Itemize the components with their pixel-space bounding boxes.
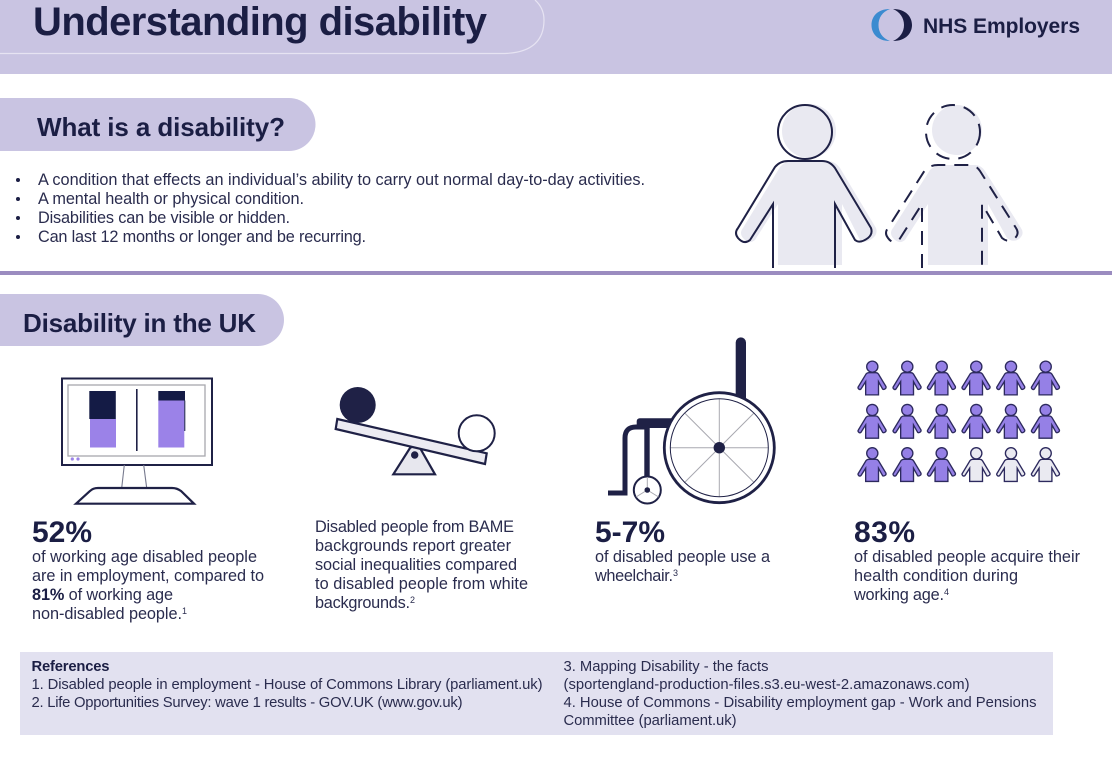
stat: 83% acquire during working age: of disabled people acquire their: [854, 548, 1081, 566]
bullet list: definition of disability: A mental health or physical condition.: [38, 190, 304, 208]
stat: 52% in employment: 81% of working age: [32, 586, 173, 604]
stat: 83% acquire during working age: health condition during: [854, 567, 1018, 585]
stat: 5-7% use a wheelchair: of disabled people use a: [595, 548, 771, 566]
bullet list: definition of disability: A condition that effects an individual’s ability to carry out normal day-to-day activities.: [38, 171, 645, 189]
stat: 5-7% use a wheelchair: [594, 516, 771, 585]
logo: NHS Employers: NHS Employers: [923, 15, 1080, 38]
icon: monitor with employment bar chart: [62, 378, 212, 504]
bullet list: definition of disability: Can last 12 months or longer and be recurring.: [38, 228, 366, 246]
stat: 5-7% use a wheelchair: wheelchair.: [594, 567, 673, 585]
logo: NHS Employers: [872, 9, 1080, 41]
stat: 5-7% use a wheelchair: 3: [673, 568, 678, 578]
references panel: 2. Life Opportunities Survey: wave 1 results - GOV.UK (www.gov.uk): [32, 695, 463, 711]
icon: visible disability person: [736, 104, 877, 268]
stat: 52% in employment: 1: [182, 606, 187, 616]
stat: 5-7% use a wheelchair: 5-7%: [595, 516, 665, 549]
stat: BAME social inequalities: backgrounds.: [315, 594, 410, 612]
heading: What is a disability?: What is a disability?: [37, 112, 285, 142]
stat: 52% in employment: 52%: [32, 516, 92, 549]
icon: seesaw showing inequality: [336, 387, 495, 474]
bullet list: definition of disability: [16, 171, 645, 246]
stat: 83% acquire during working age: 83%: [854, 516, 915, 549]
stat: BAME social inequalities: [315, 518, 528, 612]
heading: Disability in the UK: [0, 294, 284, 346]
header band: [0, 0, 1112, 74]
heading: What is a disability?: [0, 98, 316, 151]
references panel: 3. Mapping Disability - the facts: [564, 659, 768, 675]
stat: BAME social inequalities: backgrounds report greater: [315, 537, 512, 555]
references panel: [20, 652, 1053, 735]
stat: BAME social inequalities: to disabled people from white: [315, 575, 528, 593]
stat: 52% in employment: [32, 516, 264, 623]
stat: 83% acquire during working age: working age.: [853, 586, 944, 604]
icon: wheelchair: [608, 337, 774, 504]
references panel: Committee (parliament.uk): [564, 713, 737, 729]
icon: hidden disability person: [886, 105, 1023, 268]
references panel: 4. House of Commons - Disability employment gap - Work and Pensions: [564, 695, 1036, 711]
stat: BAME social inequalities: social inequalities compared: [315, 556, 517, 574]
bullet list: definition of disability: Disabilities can be visible or hidden.: [38, 209, 290, 227]
stat: BAME social inequalities: 2: [410, 595, 415, 605]
divider: [0, 271, 1112, 275]
references panel: (sportengland-production-files.s3.eu-west-2.amazonaws.com): [564, 677, 970, 693]
references panel: 1. Disabled people in employment - House of Commons Library (parliament.uk): [32, 677, 543, 693]
stat: 52% in employment: of working age disabled people: [32, 548, 257, 566]
title: Understanding disability: [33, 0, 488, 44]
references panel: References: [32, 659, 110, 675]
stat: 83% acquire during working age: [853, 516, 1081, 604]
stat: BAME social inequalities: Disabled people from BAME: [315, 518, 514, 536]
heading: Disability in the UK: Disability in the UK: [23, 308, 256, 338]
stat: 83% acquire during working age: 4: [944, 587, 949, 597]
stat: 52% in employment: non-disabled people.: [32, 605, 182, 623]
stat: 52% in employment: are in employment, compared to: [32, 567, 264, 585]
icon: 18 people pictogram, 15 of 18 highlighted: [858, 361, 1059, 481]
